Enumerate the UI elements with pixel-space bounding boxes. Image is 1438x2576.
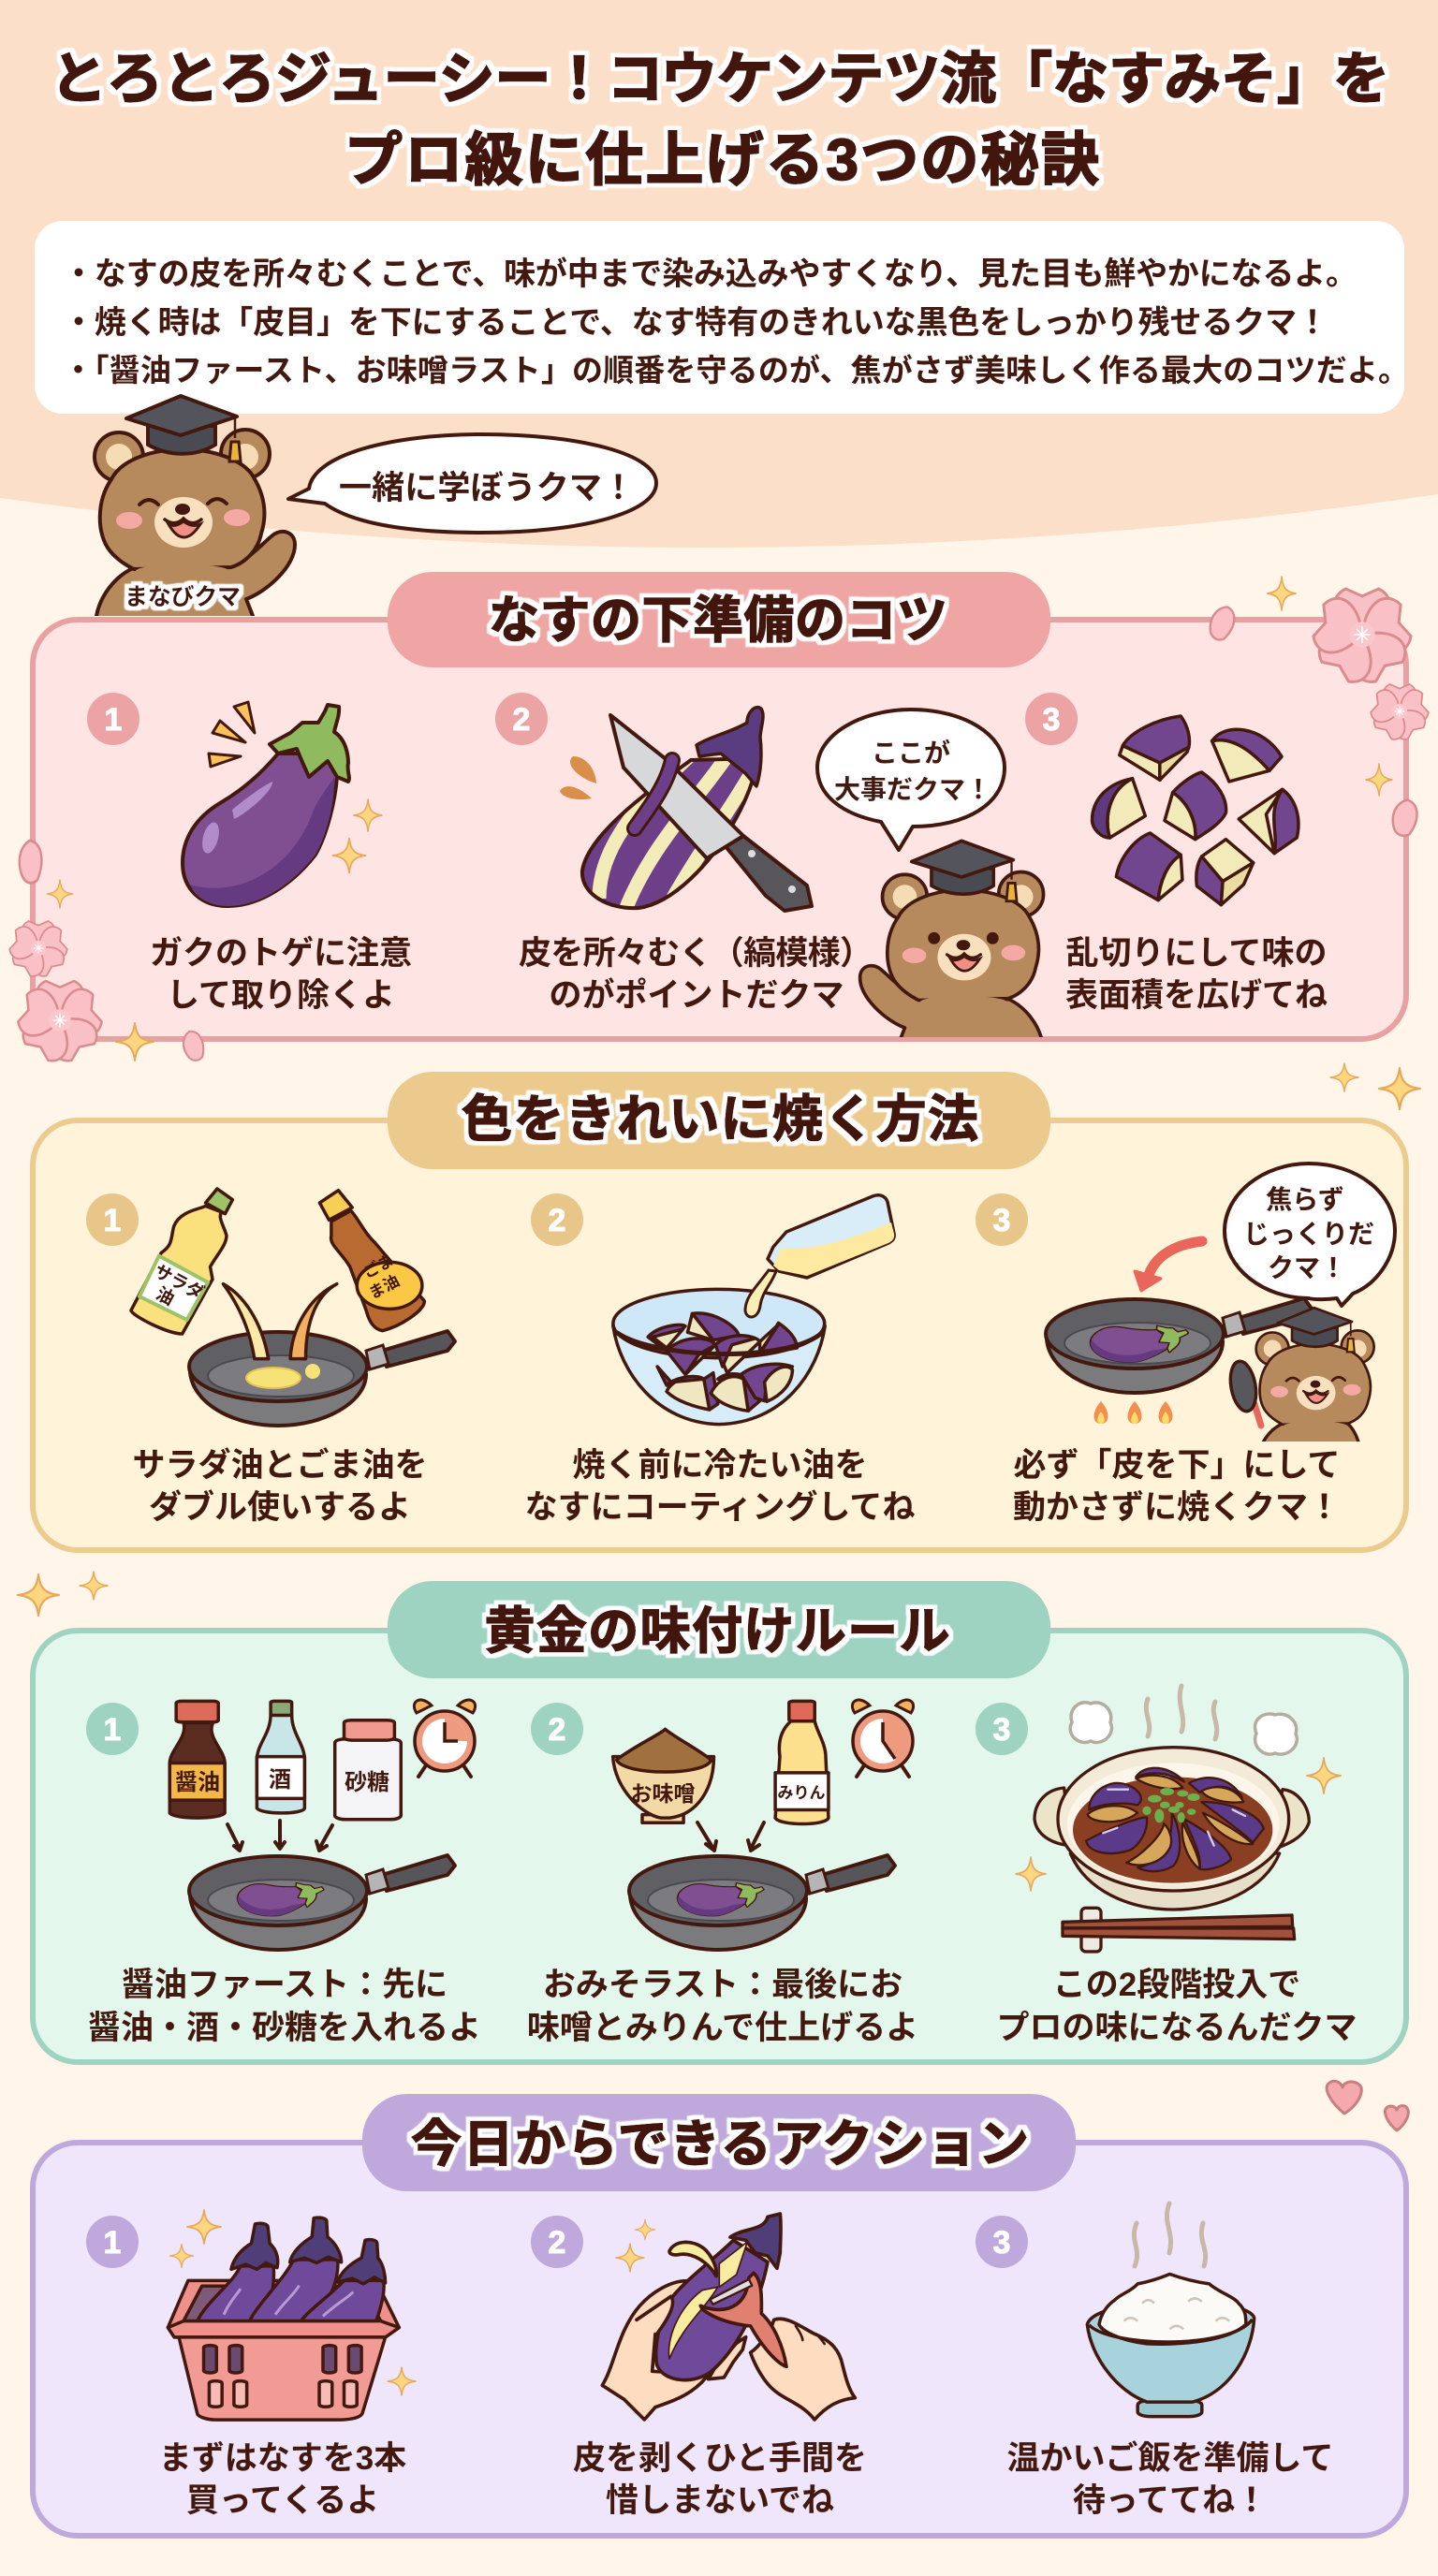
mascot bear pointing (858, 839, 1045, 1037)
header curved band (0, 0, 1438, 548)
step badge 3 (976, 2216, 1028, 2268)
icon: oil bottles pouring into pan (131, 1189, 455, 1426)
step badge 3 (976, 1193, 1028, 1246)
step badge 2: 2 (549, 2225, 565, 2261)
step 1 caption: ガクのトゲに注意 (150, 935, 412, 972)
step 3 caption: 温かいご飯を準備して (1007, 2440, 1333, 2477)
icon: soy sauce, sake, sugar, timer, pan: 酒 (269, 1767, 291, 1793)
icon: whole eggplant (183, 702, 382, 906)
step 3 caption (996, 1967, 1357, 2046)
step 2 caption: おみそラスト：最後にお (543, 1967, 902, 2003)
speech bubble: 一緒に学ぼうクマ (288, 434, 656, 533)
step 2 caption (573, 2440, 867, 2519)
step 2 caption (519, 935, 873, 1014)
panel 1 frame (33, 620, 1406, 1039)
speech bubble: ここが大事だクマ: ここが (872, 738, 950, 768)
step badge 1: 1 (104, 2225, 121, 2261)
icon: oil bottles pouring into pan: 油 (153, 1283, 178, 1310)
summary card: ・なすの皮を所々むくことで、味が中まで染み込みやすくなり、見た目も鮮やかになるよ。 (63, 256, 1357, 292)
icon: soy sauce, sake, sugar, timer, pan (169, 1700, 476, 1950)
speech bubble: ここが大事だクマ (817, 710, 1005, 850)
panel 3 heading pill (388, 1581, 1050, 1678)
step badge 1 (86, 2216, 139, 2268)
icon: miso, mirin, timer, pan (613, 1700, 914, 1950)
step badge 2: 2 (513, 702, 530, 738)
icon: hands peeling eggplant (602, 2214, 855, 2420)
speech bubble: 焦らずじっくりだクマ (1225, 1164, 1395, 1306)
icon: oil bottles pouring into pan: ま油 (366, 1272, 403, 1303)
panel 2 frame (33, 1120, 1406, 1550)
step 3 caption: 乱切りにして味の (1066, 935, 1327, 972)
step badge 1: 1 (104, 1712, 121, 1748)
step badge 2 (531, 1703, 583, 1755)
icon: oil bottles pouring into pan: サラダ (151, 1260, 208, 1304)
panel 1 heading pill: なすの下準備のコツ (489, 593, 947, 649)
step 3 caption: 必ず「皮を下」にして (1014, 1447, 1340, 1484)
step 2 caption: 惜しまないでね (606, 2482, 834, 2519)
step 1 caption (150, 935, 412, 1014)
step 2 caption: 皮を剥くひと手間を (573, 2440, 867, 2477)
panel 4 heading pill: 今日からできるアクション (411, 2116, 1029, 2173)
step badge 2: 2 (549, 1712, 565, 1748)
step 1 caption (132, 1446, 428, 1526)
step 2 caption (527, 1967, 918, 2046)
panel: なすの下準備のコツ (33, 572, 1406, 1079)
panel: 今日からできるアクション (33, 2094, 1406, 2536)
step badge 2 (495, 693, 548, 745)
icon: eggplant skin-down in pan over flames (1046, 1241, 1312, 1424)
panel 4 heading pill (362, 2094, 1076, 2191)
step 1 caption: まずはなすを3本 (159, 2440, 406, 2477)
step 3 caption: 表面積を広げてね (1065, 977, 1328, 1014)
step badge 3 (976, 1703, 1028, 1755)
title: とろとろジューシー！コウケンテツ流「なすみそ」を (51, 48, 1389, 110)
step 2 caption: 焼く前に冷たい油を (572, 1447, 868, 1484)
step 1 caption: 醤油・酒・砂糖を入れるよ (88, 2010, 481, 2046)
mascot name label: まなびクマ (125, 584, 241, 610)
summary card: ・焼く時は「皮目」を下にすることで、なす特有のきれいな黒色をしっかり残せるクマ！ (63, 305, 1328, 341)
mascot bear with pan (1228, 1307, 1375, 1442)
title (51, 48, 1389, 193)
panel 3 frame (33, 1631, 1406, 2062)
step badge 2: 2 (549, 1203, 565, 1238)
step 3 caption: 待っててね！ (1073, 2482, 1268, 2519)
panel 1 heading pill (388, 572, 1050, 667)
step 2 caption: 味噌とみりんで仕上げるよ (527, 2010, 918, 2046)
panel 2 heading pill (388, 1072, 1050, 1169)
step 3 caption: 動かさずに焼くクマ！ (1013, 1489, 1341, 1526)
decorations: cherry blossoms (7, 577, 1431, 1066)
decorations: hearts above panel 4 (1327, 2081, 1408, 2130)
panel: 黄金の味付けルール (33, 1581, 1406, 2062)
step 2 caption: のがポイントだクマ (549, 977, 844, 1014)
step 3 caption (1007, 2440, 1333, 2519)
step 3 caption (1065, 935, 1328, 1014)
step badge 1: 1 (105, 702, 122, 738)
step 3 caption (1013, 1447, 1341, 1526)
icon: soy sauce, sake, sugar, timer, pan: 砂糖 (345, 1770, 389, 1795)
step badge 3 (1025, 693, 1078, 745)
title: プロ級に仕上げる3つの秘訣 (345, 128, 1099, 193)
icon: bowl of steaming rice (1087, 2203, 1255, 2417)
step 2 caption: 皮を所々むく（縞模様） (519, 935, 873, 972)
step 3 caption: この2段階投入で (1053, 1967, 1300, 2003)
step badge 1 (86, 1193, 139, 1246)
decorations: sparkles above panel 2 (1330, 1063, 1420, 1109)
step badge 3: 3 (993, 1712, 1010, 1748)
icon: soy sauce, sake, sugar, timer, pan: 醤油 (175, 1770, 220, 1795)
step 1 caption: して取り除くよ (167, 977, 395, 1014)
step badge 3: 3 (1043, 702, 1060, 738)
step 1 caption: 買ってくるよ (186, 2482, 379, 2519)
step 1 caption: サラダ油とごま油を (132, 1446, 428, 1484)
panel 4 frame (33, 2143, 1406, 2536)
step 2 caption: なすにコーティングしてね (525, 1489, 915, 1526)
icon: basket of eggplants (168, 2210, 416, 2420)
speech bubble: 焦らずじっくりだクマ: じっくりだ (1243, 1220, 1374, 1249)
icon: glass bowl with eggplant and oil (613, 1195, 894, 1425)
mascot bear: まなびクマ (93, 394, 297, 616)
panel: 色をきれいに焼く方法 (33, 1072, 1406, 1550)
panel 2 heading pill: 色をきれいに焼く方法 (462, 1091, 978, 1148)
icon: eggplant chunks (1093, 716, 1299, 905)
step 1 caption: 醤油ファースト：先に (122, 1967, 448, 2003)
step 3 caption: プロの味になるんだクマ (996, 2010, 1357, 2046)
summary card (35, 221, 1409, 414)
step badge 1: 1 (104, 1203, 121, 1238)
step 1 caption (88, 1967, 481, 2046)
icon: striped eggplant and knife (560, 708, 812, 917)
icon: miso, mirin, timer, pan: みりん (777, 1784, 826, 1802)
decorations: sparkles above panel 3 (18, 1572, 108, 1616)
step 1 caption: ダブル使いするよ (149, 1488, 411, 1526)
step badge 2 (531, 1193, 583, 1246)
step 2 caption (525, 1447, 915, 1526)
step badge 1 (86, 1703, 139, 1755)
step badge 2 (531, 2216, 583, 2268)
icon: oil bottles pouring into pan: ごま (360, 1251, 397, 1282)
icon: miso, mirin, timer, pan: お味噌 (631, 1781, 695, 1806)
step badge 1 (87, 693, 139, 745)
speech bubble: 焦らずじっくりだクマ: クマ！ (1268, 1253, 1346, 1282)
icon: finished nasu miso dish (1016, 1686, 1341, 1952)
step badge 3: 3 (993, 1203, 1010, 1238)
summary card: ・「醤油ファースト、お味噌ラスト」の順番を守るのが、焦がさず美味しく作る最大のコツだよ。 (63, 353, 1409, 388)
speech bubble: ここが大事だクマ: 大事だクマ！ (834, 775, 991, 804)
step badge 3: 3 (993, 2225, 1010, 2261)
speech bubble: 一緒に学ぼうクマ: 一緒に学ぼうクマ！ (339, 470, 635, 506)
step 1 caption (159, 2440, 406, 2519)
speech bubble: 焦らずじっくりだクマ: 焦らず (1266, 1185, 1344, 1214)
panel 3 heading pill: 黄金の味付けルール (485, 1603, 949, 1660)
